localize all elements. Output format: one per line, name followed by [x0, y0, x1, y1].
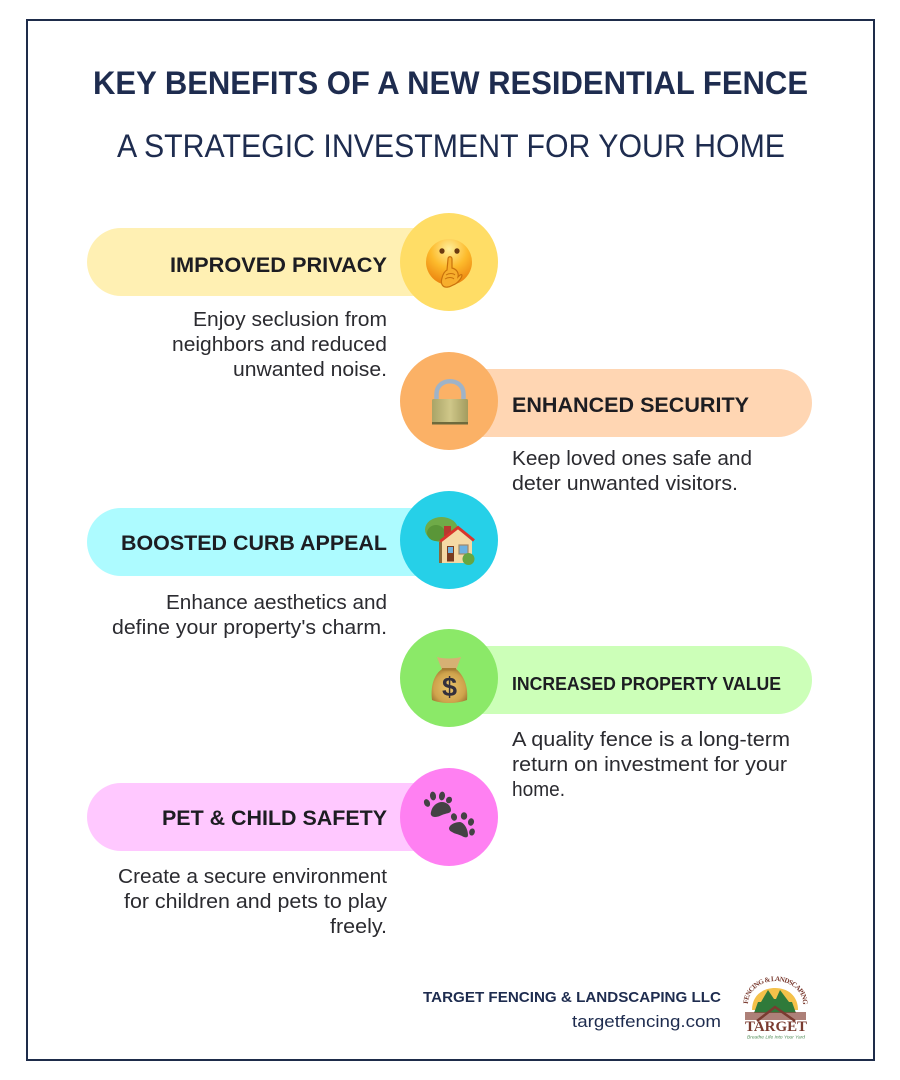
icon: company logo	[743, 976, 808, 1040]
heading: boosted curb appeal: BOOSTED CURB APPEAL	[121, 532, 387, 555]
pill: pet and child safety	[87, 783, 450, 851]
description: enhanced security: Keep loved ones safe and	[512, 448, 752, 470]
description: pet and child safety: freely.	[330, 916, 387, 938]
panel: increased property value	[400, 629, 812, 801]
description: boosted curb appeal: Enhance aesthetics and	[166, 592, 387, 614]
icon: padlock	[432, 381, 468, 424]
description: increased property value: A quality fence is a long-term	[512, 729, 790, 751]
description: improved privacy: neighbors and reduced	[172, 334, 387, 356]
pill: enhanced security	[450, 369, 812, 437]
description: improved privacy	[172, 309, 387, 381]
heading: improved privacy: IMPROVED PRIVACY	[170, 254, 387, 277]
panel: boosted curb appeal	[87, 491, 498, 639]
pill: improved privacy	[87, 228, 450, 296]
description: improved privacy: Enjoy seclusion from	[193, 309, 387, 331]
description: improved privacy: unwanted noise.	[233, 359, 387, 381]
heading: enhanced security: ENHANCED SECURITY	[512, 394, 749, 417]
panel: improved privacy	[87, 213, 498, 381]
heading: increased property value: INCREASED PROPERTY VALUE	[512, 674, 781, 694]
description: increased property value	[512, 729, 790, 801]
description: enhanced security: deter unwanted visitors.	[512, 473, 738, 495]
icon: money bag: $	[442, 672, 457, 702]
panel: enhanced security	[400, 352, 812, 495]
description: pet and child safety	[118, 866, 387, 938]
pill: increased property value	[450, 646, 812, 714]
subtitle: A STRATEGIC INVESTMENT FOR YOUR HOME	[117, 128, 785, 164]
icon: company logo: TARGET	[745, 1019, 807, 1035]
icon: house with tree	[425, 517, 474, 565]
circle: improved privacy	[400, 213, 498, 311]
icon: company logo: Breathe Life Into Your Yard	[747, 1034, 806, 1040]
footer website: targetfencing.com	[572, 1012, 721, 1031]
title: KEY BENEFITS OF A NEW RESIDENTIAL FENCE	[93, 65, 808, 101]
description: pet and child safety: Create a secure environment	[118, 866, 387, 888]
description: increased property value: home.	[512, 779, 565, 801]
description: boosted curb appeal	[112, 592, 387, 639]
panel: pet and child safety	[87, 768, 498, 938]
heading: pet and child safety: PET & CHILD SAFETY	[162, 807, 387, 830]
description: increased property value: return on investment for your	[512, 754, 787, 776]
footer company name: TARGET FENCING & LANDSCAPING LLC	[423, 989, 721, 1006]
description: enhanced security	[512, 448, 752, 495]
description: boosted curb appeal: define your property's charm.	[112, 617, 387, 639]
icon: company logo: FENCING & LANDSCAPING	[743, 976, 808, 1004]
pill: boosted curb appeal	[87, 508, 450, 576]
icon: money bag	[432, 657, 467, 703]
circle: pet and child safety	[400, 768, 498, 866]
circle: boosted curb appeal	[400, 491, 498, 589]
icon: paw prints	[423, 791, 476, 837]
circle: enhanced security	[400, 352, 498, 450]
description: pet and child safety: for children and pets to play	[124, 891, 387, 913]
circle: increased property value	[400, 629, 498, 727]
icon: shushing face	[426, 239, 472, 287]
